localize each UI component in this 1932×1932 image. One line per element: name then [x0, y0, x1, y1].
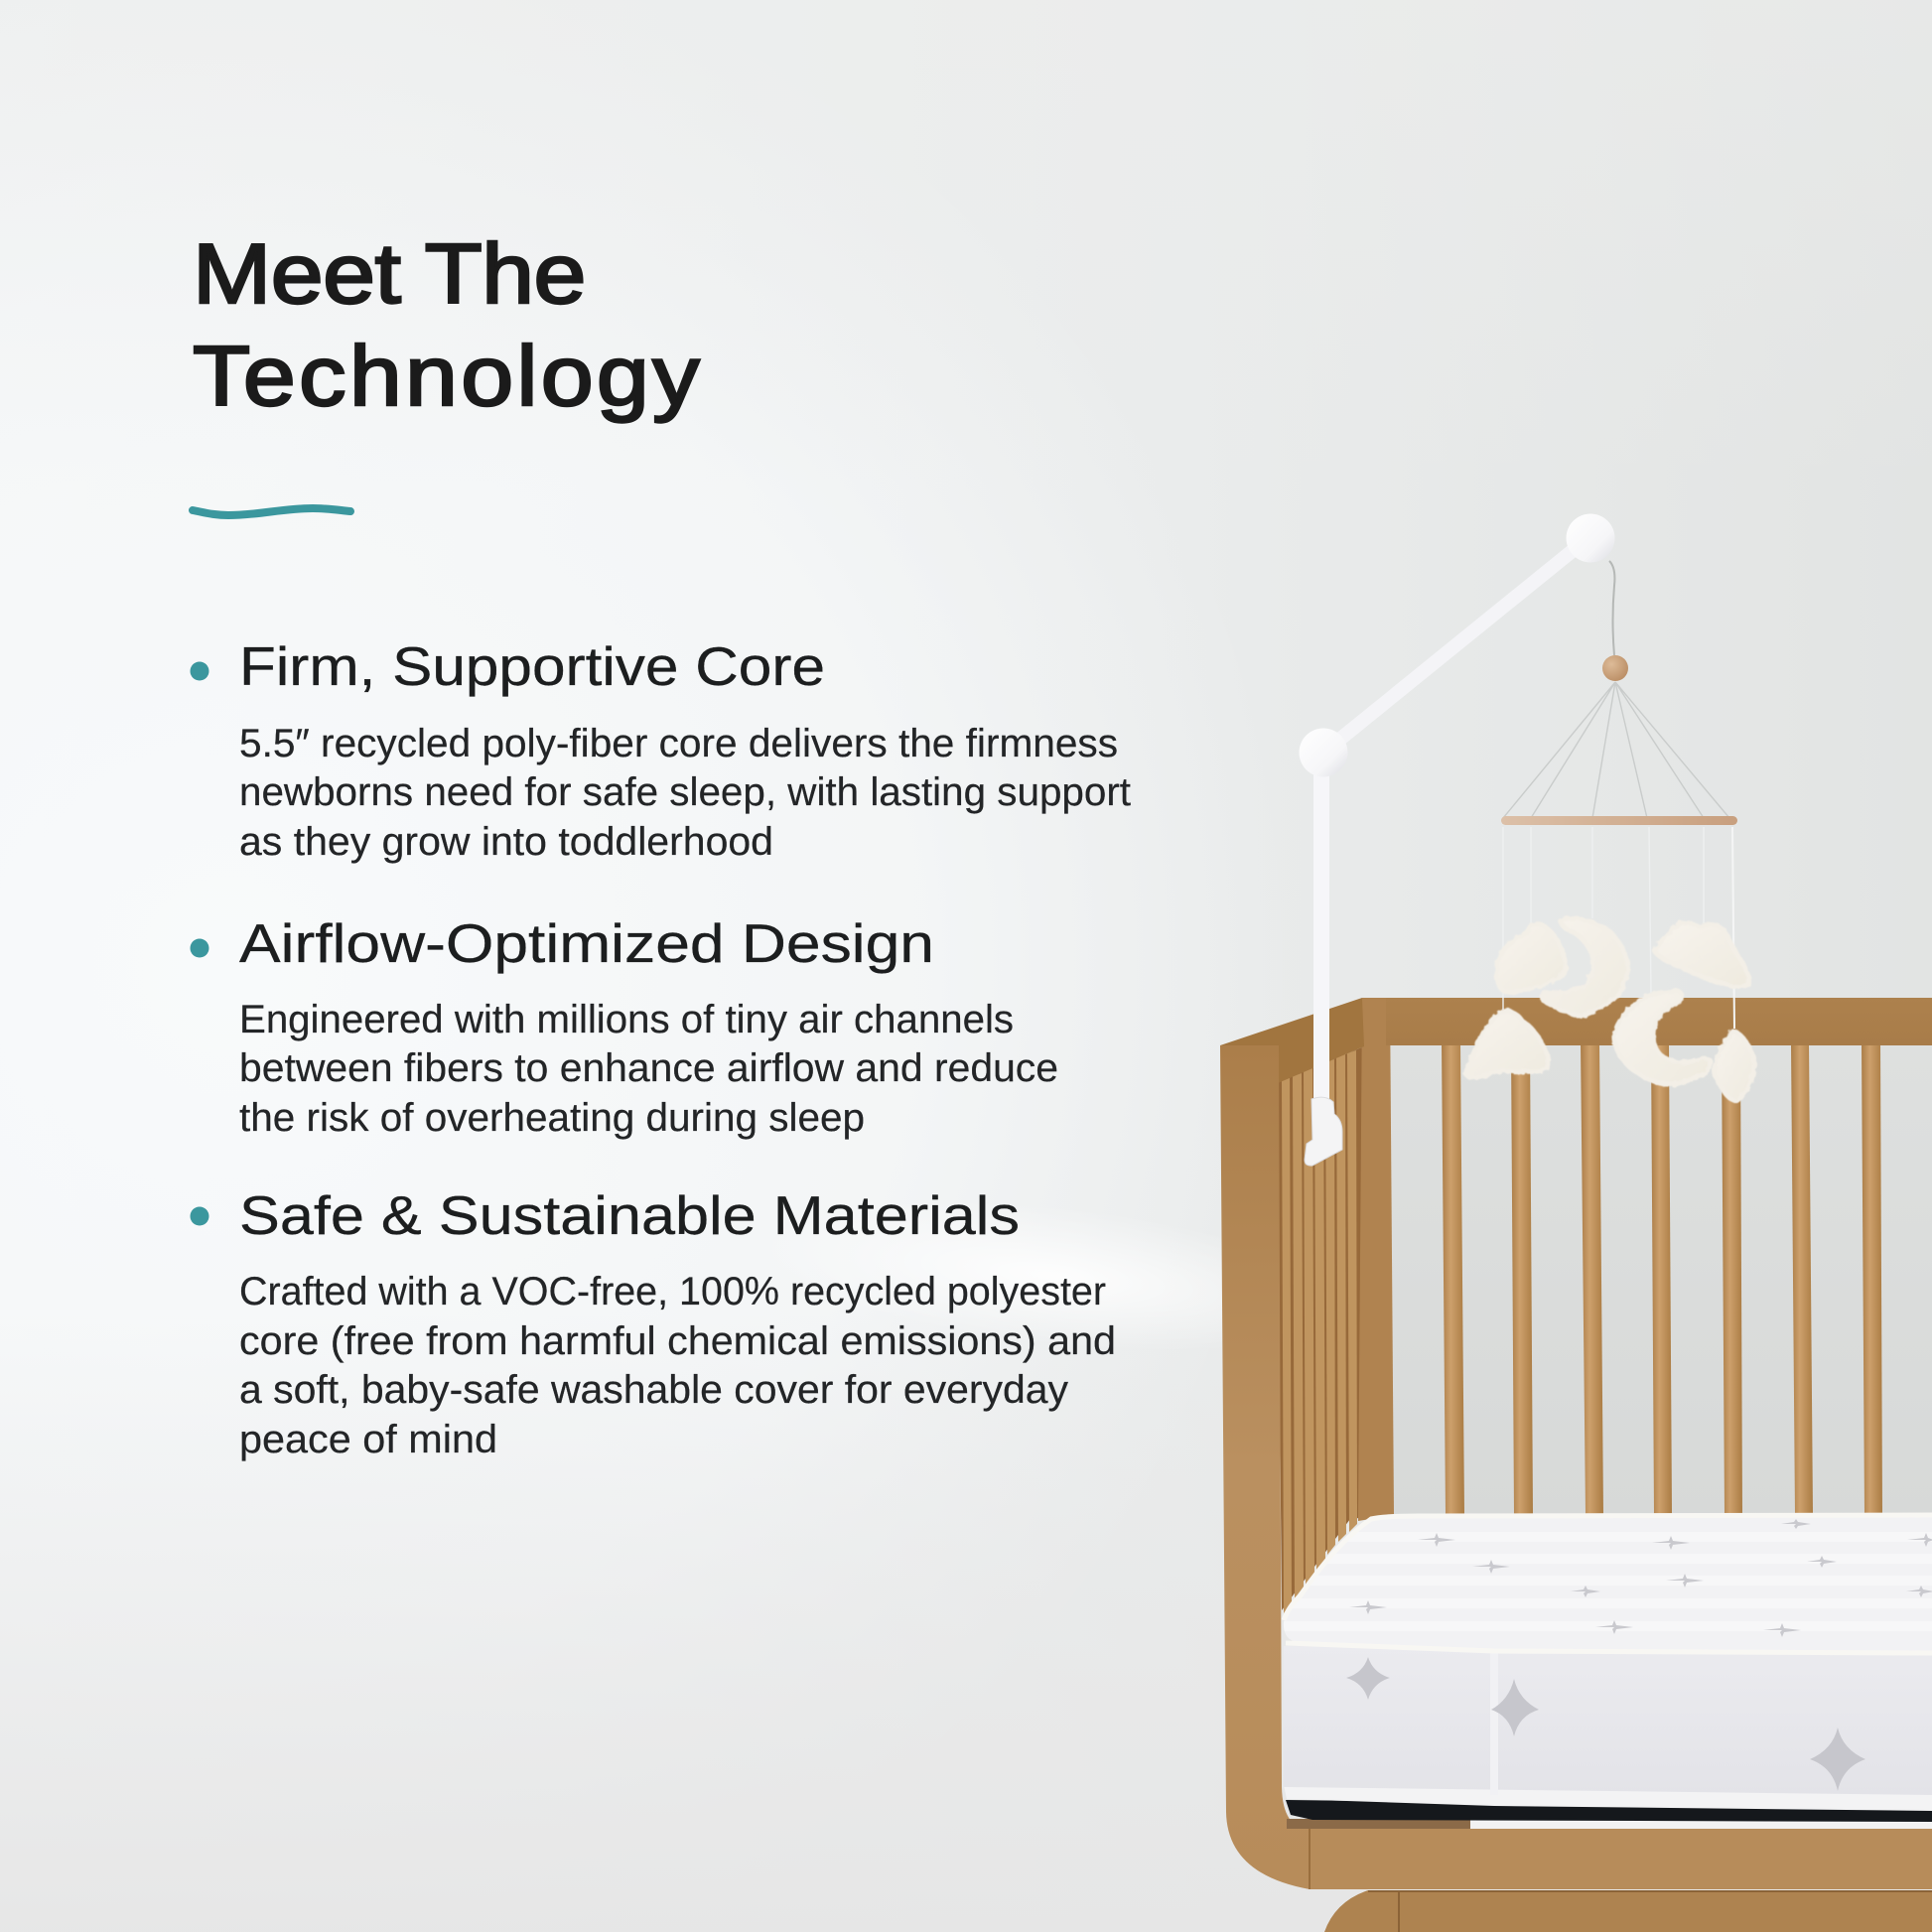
- wooden bead: [1602, 655, 1628, 681]
- rail seam: [1309, 1829, 1311, 1889]
- title: Meet The: [193, 227, 586, 322]
- clamp: [1305, 1097, 1342, 1166]
- mattress base gap: [1470, 1821, 1932, 1829]
- description: peace of mind: [239, 1418, 497, 1461]
- feature: safe and sustainable materials: [191, 1184, 1116, 1461]
- description: [239, 722, 1131, 864]
- description: newborns need for safe sleep, with lasting support: [239, 770, 1131, 814]
- wooden hoop: [1501, 816, 1737, 825]
- vertical pole: [1313, 769, 1329, 1102]
- mattress piping: [1284, 1515, 1932, 1653]
- crib side slats: [1277, 1046, 1366, 1613]
- heading: Airflow-Optimized Design: [239, 912, 934, 974]
- feature: firm supportive core: [191, 635, 1131, 864]
- description: Crafted with a VOC-free, 100% recycled polyester: [239, 1270, 1106, 1313]
- baby mobile: [1299, 514, 1754, 1166]
- mattress top stripes: [1281, 1537, 1932, 1626]
- crib front post: [1220, 1045, 1310, 1889]
- crib spindles: [1442, 1042, 1882, 1515]
- crib corner block: [1358, 998, 1394, 1521]
- cloud right lower: [1715, 1031, 1754, 1101]
- title: [193, 227, 700, 424]
- mattress top small stars: [1349, 1519, 1932, 1637]
- description: between fibers to enhance airflow and reduce: [239, 1046, 1058, 1090]
- cloud left lower: [1465, 1010, 1549, 1078]
- upper joint ball: [1567, 514, 1614, 562]
- bullet: [191, 1207, 208, 1225]
- mattress: [1281, 1515, 1932, 1829]
- teal wavy divider: [193, 508, 350, 515]
- crib top rail: [1386, 998, 1932, 1045]
- mattress bottom band: [1284, 1785, 1932, 1811]
- mattress dark base: [1286, 1800, 1932, 1822]
- bullet: [191, 661, 208, 681]
- description: 5.5″ recycled poly-fiber core delivers the firmness: [239, 722, 1118, 765]
- mattress top surface: [1284, 1515, 1932, 1653]
- mattress base left: [1287, 1819, 1470, 1829]
- crib bottom rail: [1310, 1829, 1932, 1889]
- description: [239, 998, 1058, 1140]
- description: core (free from harmful chemical emissions) and: [239, 1319, 1116, 1363]
- feature: airflow optimized design: [191, 912, 1058, 1140]
- title: Technology: [193, 330, 700, 424]
- diagonal arm: [1323, 536, 1590, 753]
- bullet: [191, 939, 208, 957]
- mobile arm: [1299, 514, 1614, 1166]
- description: the risk of overheating during sleep: [239, 1096, 865, 1140]
- description: Engineered with millions of tiny air channels: [239, 998, 1014, 1041]
- description: as they grow into toddlerhood: [239, 820, 773, 864]
- mattress side panel: [1284, 1646, 1932, 1795]
- cloud right upper: [1654, 923, 1749, 987]
- crib base shadow line: [1368, 1891, 1932, 1932]
- crescent moon lower: [1614, 991, 1711, 1085]
- mattress corner seam: [1490, 1650, 1498, 1795]
- cloud left upper: [1496, 924, 1566, 992]
- crescent moon upper: [1542, 918, 1628, 1017]
- plush clouds and moons: [1465, 918, 1754, 1101]
- description: [239, 1270, 1116, 1461]
- heading: Firm, Supportive Core: [239, 635, 825, 697]
- crib: [1220, 998, 1932, 1932]
- heading: Safe & Sustainable Materials: [239, 1184, 1020, 1246]
- crib side rail: [1220, 998, 1364, 1083]
- crib base: [1324, 1890, 1932, 1932]
- lower joint ball: [1299, 729, 1348, 776]
- description: a soft, baby-safe washable cover for everyday: [239, 1368, 1068, 1412]
- mattress side large stars: [1346, 1657, 1865, 1791]
- mobile strings: [1503, 561, 1734, 1029]
